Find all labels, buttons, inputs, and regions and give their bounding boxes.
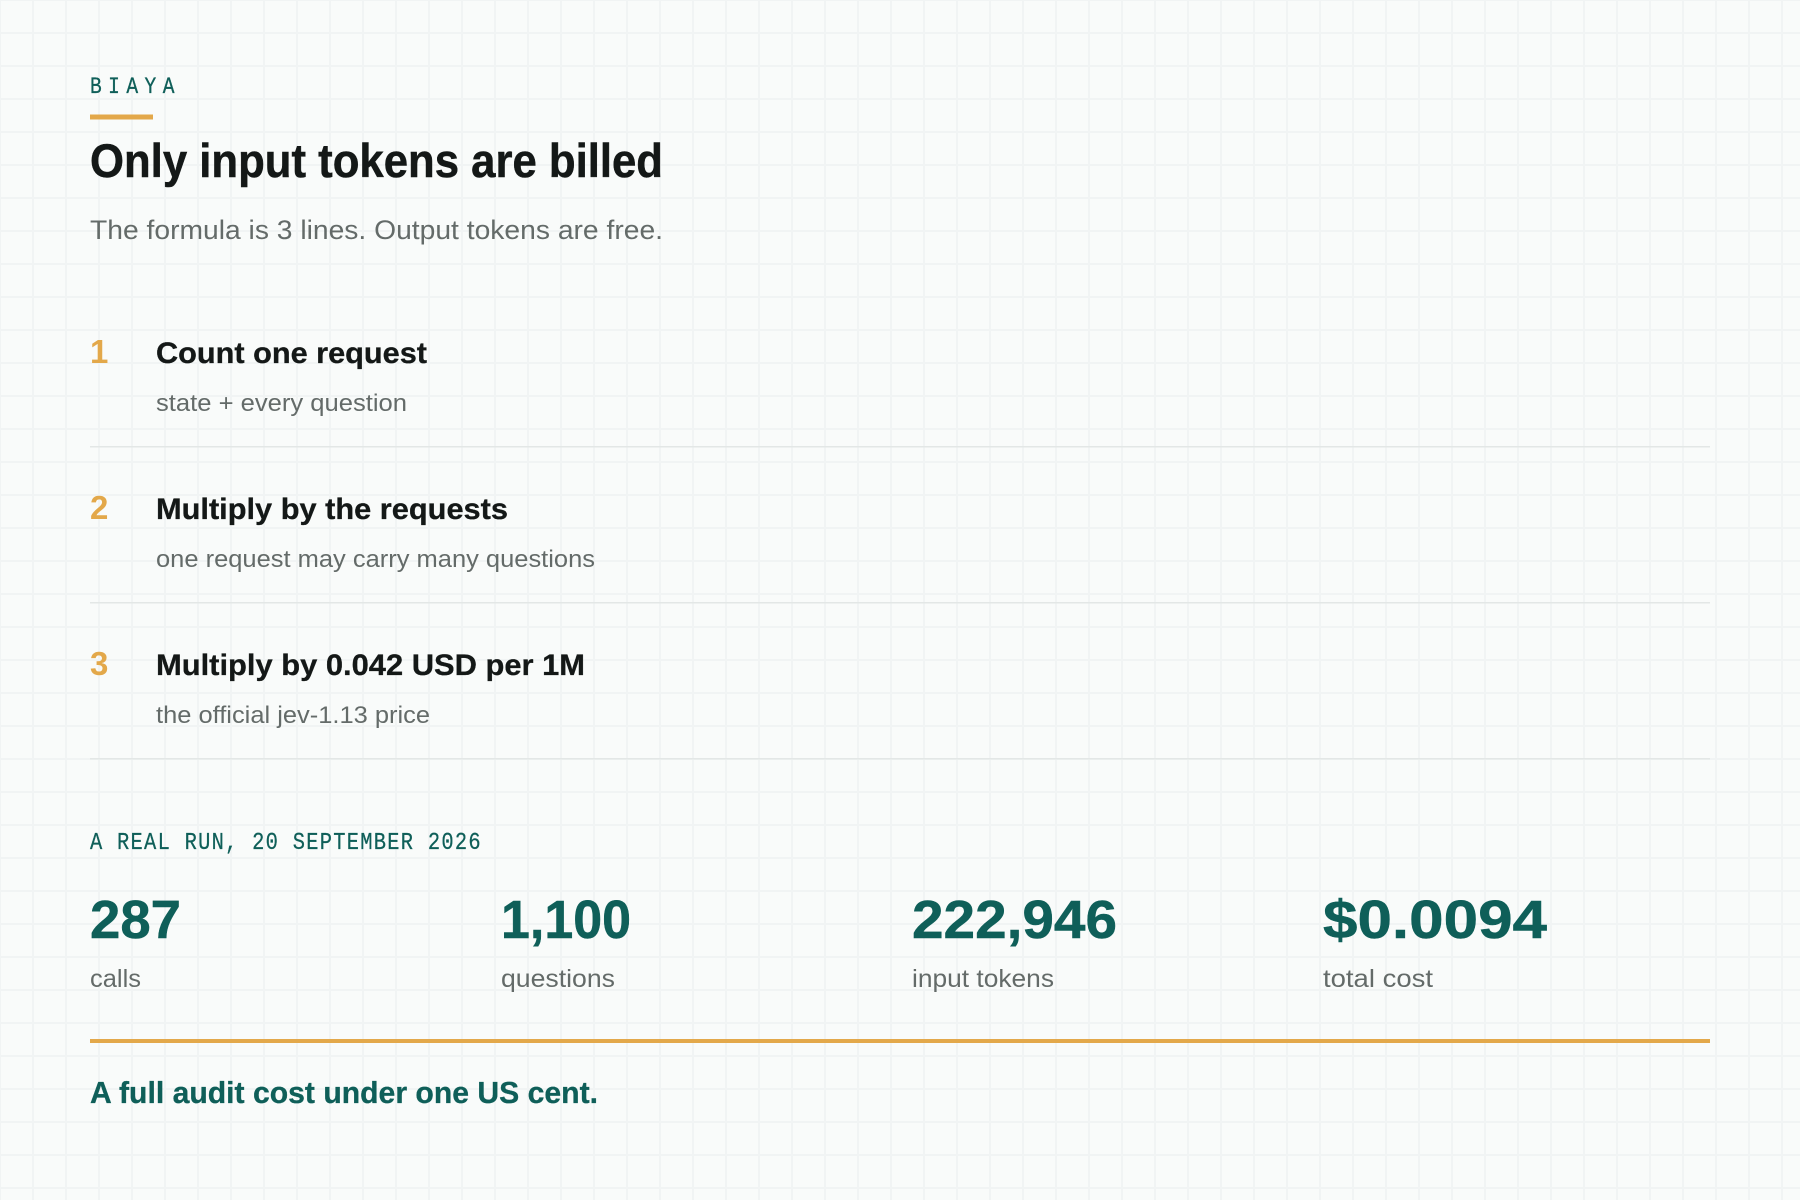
stat: total cost: total cost	[1323, 965, 1433, 993]
step 1 description: state + every question	[156, 390, 407, 417]
header	[90, 75, 663, 245]
stat: input tokens	[912, 890, 1117, 993]
stat: calls: 287	[90, 890, 181, 950]
stat: questions: questions	[501, 965, 615, 993]
eyebrow label: BIAYA	[90, 75, 181, 101]
stats row	[90, 890, 1547, 993]
step number 2: 2	[90, 489, 108, 526]
closing statement: A full audit cost under one US cent.	[90, 1075, 598, 1110]
stat: questions	[501, 890, 631, 993]
step number 3: 3	[90, 645, 108, 682]
step 3 title: Multiply by 0.042 USD per 1M	[156, 649, 585, 682]
step 1 title: Count one request	[156, 337, 427, 370]
step 3	[90, 645, 585, 729]
stat: input tokens: input tokens	[912, 965, 1054, 993]
subtitle: The formula is 3 lines. Output tokens are free.	[90, 215, 663, 245]
step 3 description: the official jev-1.13 price	[156, 702, 430, 729]
accent divider	[90, 1039, 1710, 1043]
step number 1: 1	[90, 333, 108, 370]
section label: A REAL RUN, 20 SEPTEMBER 2026	[90, 829, 482, 857]
stat: total cost: $0.0094	[1323, 890, 1547, 950]
step 1	[90, 333, 427, 417]
accent bar	[90, 114, 153, 120]
title: Only input tokens are billed	[90, 134, 663, 187]
stat: questions: 1,100	[501, 890, 631, 950]
stat: total cost	[1323, 890, 1547, 993]
stat: calls: calls	[90, 965, 141, 993]
step 2 description: one request may carry many questions	[156, 546, 595, 573]
step 2	[90, 489, 595, 573]
stat: input tokens: 222,946	[912, 890, 1117, 950]
stat: calls	[90, 890, 181, 993]
step 2 title: Multiply by the requests	[156, 493, 508, 526]
